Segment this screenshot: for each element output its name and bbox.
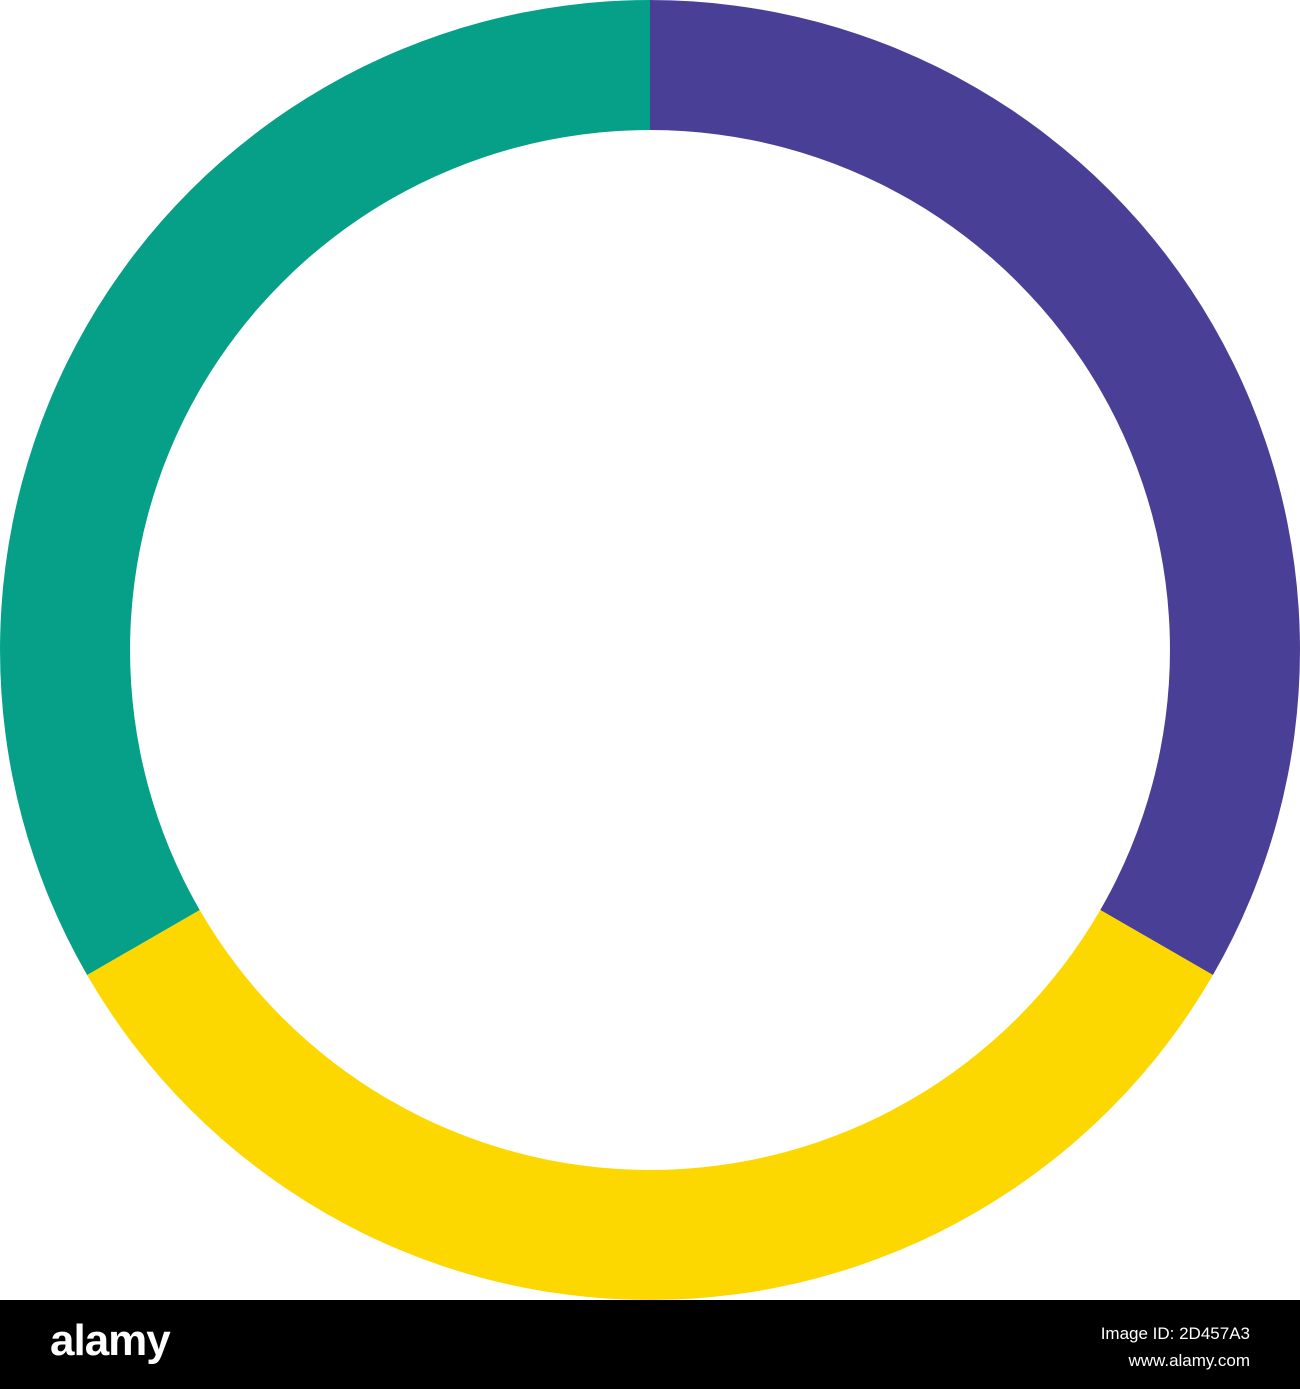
segment: green bbox=[0, 0, 650, 975]
segment: purple bbox=[650, 0, 1300, 975]
image id text: www.alamy.com bbox=[1128, 1351, 1250, 1370]
logo text: alamy bbox=[50, 1316, 170, 1365]
footer bar bbox=[0, 1300, 1300, 1389]
segment: yellow bbox=[87, 910, 1213, 1300]
image id text bbox=[1101, 1324, 1250, 1370]
image id text: Image ID: 2D457A3 bbox=[1101, 1324, 1250, 1343]
